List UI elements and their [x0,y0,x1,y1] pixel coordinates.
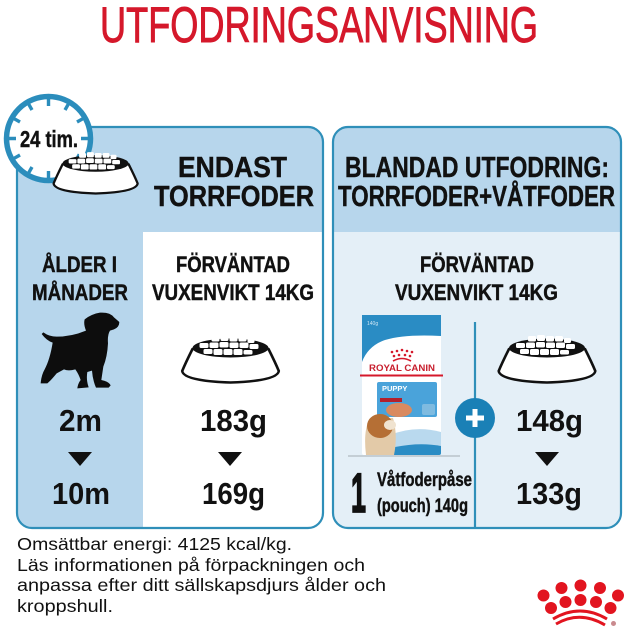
dry food amounts: 169g [202,476,265,511]
heading: mixed feeding [338,152,615,213]
mixed food amounts: 148g [516,403,583,438]
pouch quantity label: Våtfoderpåse [377,470,472,491]
column heading: expected adult weight: VUXENVIKT 14KG [395,280,558,305]
column heading: expected adult weight: FÖRVÄNTAD [420,252,534,277]
pouch product image: PUPPY [382,384,407,393]
energy and feeding note: Omsättbar energi: 4125 kcal/kg. [17,534,292,554]
pouch product image [348,315,460,456]
energy and feeding note: anpassa efter ditt sällskapsdjurs ålder och [17,575,386,595]
pouch product image: ROYAL CANIN [369,363,435,373]
icon: food bowl [499,335,595,382]
dry food amounts: 183g [200,403,267,438]
column heading: age in months [32,251,128,305]
dry food amounts [200,403,267,511]
mixed food amounts: 133g [516,476,582,511]
heading: dry food only [154,152,314,213]
heading: dry food only: ENDAST [178,152,287,184]
icon: food bowl [182,335,279,382]
icon: 24 hour clock: 24 tim. [20,126,78,152]
pouch quantity label: (pouch) 140g [377,496,468,517]
icon: puppy silhouette [41,313,119,388]
age values: 2m [59,403,102,438]
icon: food bowl with kibble [54,152,138,193]
icon: 24 hour clock [6,96,91,181]
column heading: expected adult weight: VUXENVIKT 14KG [152,280,314,305]
pouch product image: 140g [367,321,378,327]
column heading: age in months: MÅNADER [32,279,128,305]
pouch quantity label [351,461,472,524]
heading: dry food only: TORRFODER [154,181,314,213]
panel: mixed feeding [333,127,621,528]
energy and feeding note [17,534,386,616]
icon: plus [455,398,495,438]
column heading: expected adult weight [395,252,558,305]
column heading: expected adult weight [152,252,314,305]
column heading: expected adult weight: FÖRVÄNTAD [176,252,290,277]
age values [52,403,110,511]
energy and feeding note: Läs informationen på förpackningen och [17,555,365,575]
pouch quantity label: 1 [351,461,366,524]
logo: Royal Canin crown [538,580,624,626]
energy and feeding note: kroppshull. [17,596,113,616]
age values: 10m [52,476,110,511]
mixed food amounts [516,403,583,511]
column heading: age in months: ÅLDER I [42,251,117,277]
panel: dry food only [17,127,323,528]
